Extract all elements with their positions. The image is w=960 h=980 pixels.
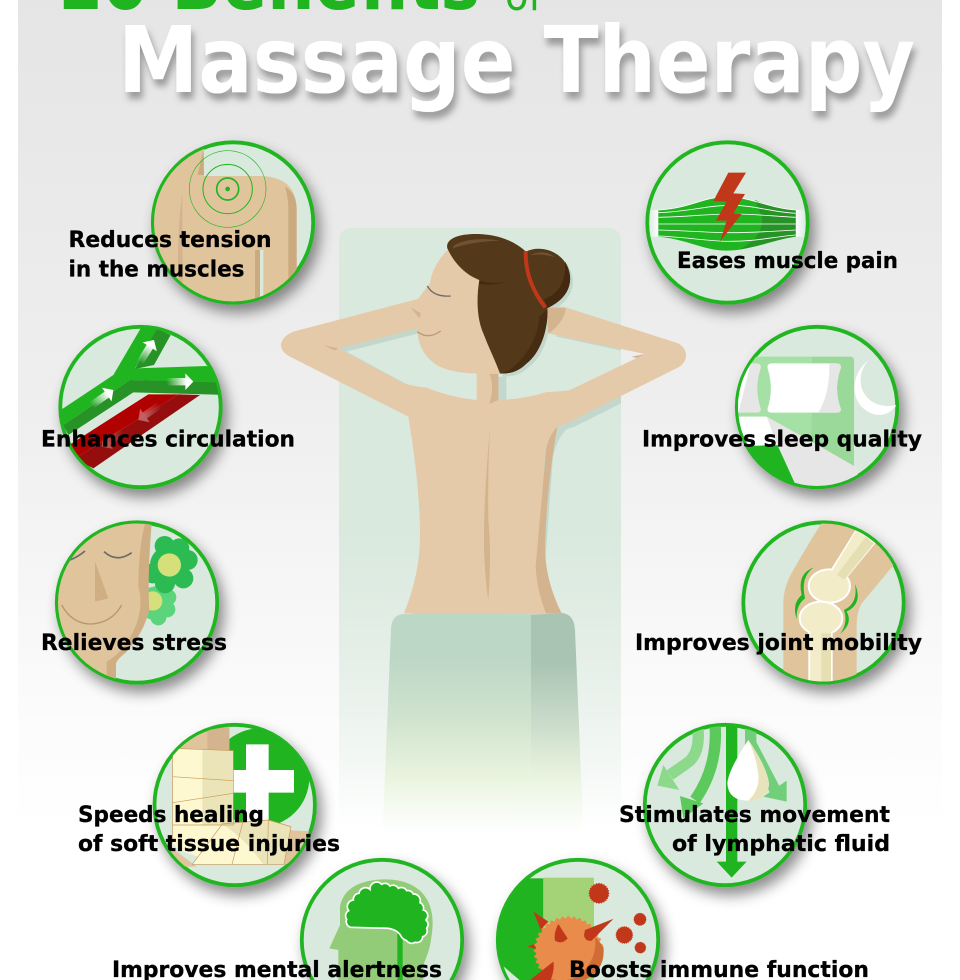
panel: speeds healing of soft tissue injuries bbox=[78, 725, 340, 885]
label: Improves sleep quality bbox=[642, 426, 922, 452]
badge circle bbox=[647, 142, 808, 303]
panel: reduces tension in the muscles bbox=[68, 137, 313, 310]
icon: muscle with lightning bolt bbox=[648, 173, 806, 251]
badge circle bbox=[645, 725, 805, 885]
label: in the muscles bbox=[68, 256, 244, 282]
badge circle bbox=[154, 725, 315, 885]
label: Enhances circulation bbox=[41, 426, 295, 452]
eye bbox=[427, 286, 451, 296]
icon: blood vessels bbox=[58, 327, 227, 468]
torso and arms bbox=[281, 298, 686, 613]
label: Reduces tension bbox=[68, 227, 272, 253]
badge circle bbox=[737, 327, 897, 487]
icon: lymph flow arrows and droplet bbox=[657, 723, 787, 878]
panel: improves mental alertness bbox=[112, 860, 462, 980]
label: of lymphatic fluid bbox=[672, 831, 890, 857]
panel: improves joint mobility bbox=[635, 517, 922, 692]
panel: eases muscle pain bbox=[647, 142, 898, 303]
icon: bandaged limb with medical cross bbox=[163, 727, 317, 867]
icon: knee joint bbox=[783, 524, 894, 682]
mouth bbox=[417, 331, 441, 336]
panel: improves sleep quality bbox=[642, 327, 922, 493]
icon: bed with pillows and moon bbox=[738, 356, 896, 486]
label: Stimulates movement bbox=[619, 802, 890, 828]
panel: stimulates movement of lymphatic fluid bbox=[619, 723, 890, 885]
badge circle bbox=[57, 522, 217, 683]
hair bbox=[447, 234, 570, 373]
label: Improves joint mobility bbox=[635, 630, 922, 656]
woman lying on table bbox=[281, 234, 694, 835]
title bbox=[56, 0, 915, 114]
badge circle bbox=[60, 327, 221, 487]
hair band bbox=[526, 251, 545, 307]
badge circle bbox=[743, 522, 904, 683]
badge circle bbox=[498, 860, 658, 980]
icon: immune cell and viruses bbox=[493, 878, 648, 980]
label: of soft tissue injuries bbox=[78, 831, 340, 857]
panel: boosts immune function bbox=[493, 860, 869, 980]
panel: enhances circulation bbox=[41, 327, 295, 487]
icon: calm face with flowers bbox=[58, 524, 198, 679]
label: Relieves stress bbox=[41, 630, 227, 656]
head bbox=[418, 250, 510, 374]
icon: head with brain bbox=[329, 879, 433, 980]
body shading bbox=[323, 307, 645, 613]
icon: shoulder with tension rings bbox=[154, 149, 297, 302]
panel: relieves stress bbox=[41, 520, 227, 690]
massage table bbox=[339, 228, 621, 832]
label: Speeds healing bbox=[78, 802, 264, 828]
badge circle bbox=[302, 860, 462, 980]
towel bbox=[383, 613, 583, 835]
badge circle bbox=[153, 142, 313, 303]
body shadow bbox=[289, 237, 694, 617]
label: Eases muscle pain bbox=[677, 248, 898, 274]
